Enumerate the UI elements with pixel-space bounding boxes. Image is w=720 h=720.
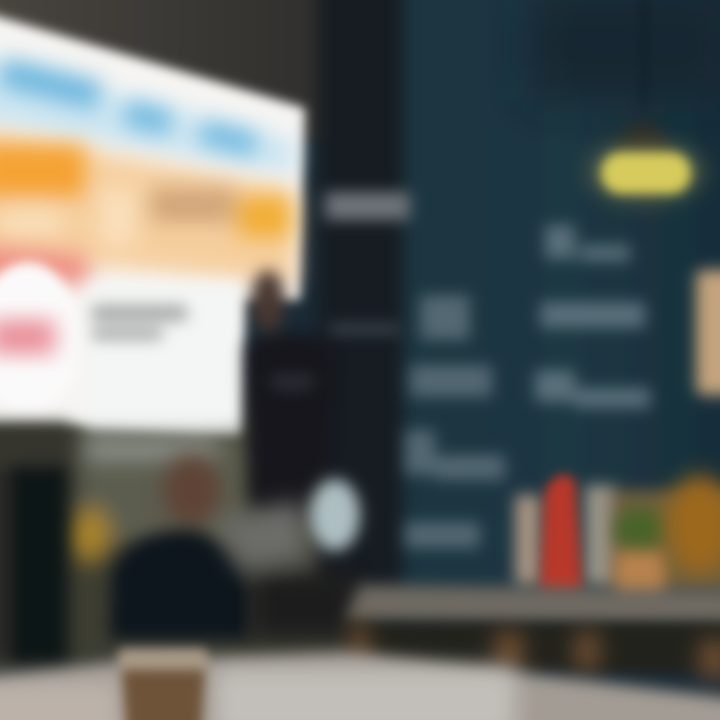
- screen: white circle with pink label: [0, 262, 80, 414]
- panel: view below screen: [70, 435, 248, 563]
- screen: red accent: [0, 245, 92, 285]
- text block: chalk writing right: [535, 225, 650, 408]
- figure: left standing person: [0, 422, 70, 665]
- heading: white sign on column: [325, 192, 410, 220]
- panel: dark column: [318, 0, 402, 590]
- panel: shelf plank: [345, 585, 720, 625]
- panel: shelf items: [515, 474, 720, 596]
- text block: chalk writing left: [405, 295, 505, 548]
- screen: orange highlight blocks: [0, 145, 290, 246]
- panel: projected screen: [0, 8, 305, 435]
- shelf: orange plant: [666, 475, 720, 575]
- panel: under-shelf cabinet: [345, 622, 720, 678]
- text: column mid caption: [330, 322, 400, 336]
- screen: blue text streaks: [0, 58, 258, 156]
- screen: sky blue header band: [0, 55, 295, 175]
- screen: grey text: [92, 305, 187, 340]
- figure: standing presenter: [245, 270, 335, 520]
- object: white paper and table items: [215, 500, 360, 640]
- shelf: potted plant: [614, 508, 666, 596]
- object: wall frame at right: [696, 270, 720, 395]
- icon: coffee cup: [118, 648, 208, 720]
- shelf: cream backing cards: [515, 485, 720, 590]
- figure: seated person: [110, 454, 250, 640]
- icon: hanging lamp: [588, 0, 704, 202]
- panel: chalkboard wall: [398, 0, 720, 595]
- panel: foreground table: [0, 652, 720, 720]
- shelf: red bottle: [540, 474, 582, 590]
- screen: orange band: [0, 128, 295, 285]
- screen: white lower panel: [85, 282, 240, 430]
- object: pale glass: [310, 479, 360, 551]
